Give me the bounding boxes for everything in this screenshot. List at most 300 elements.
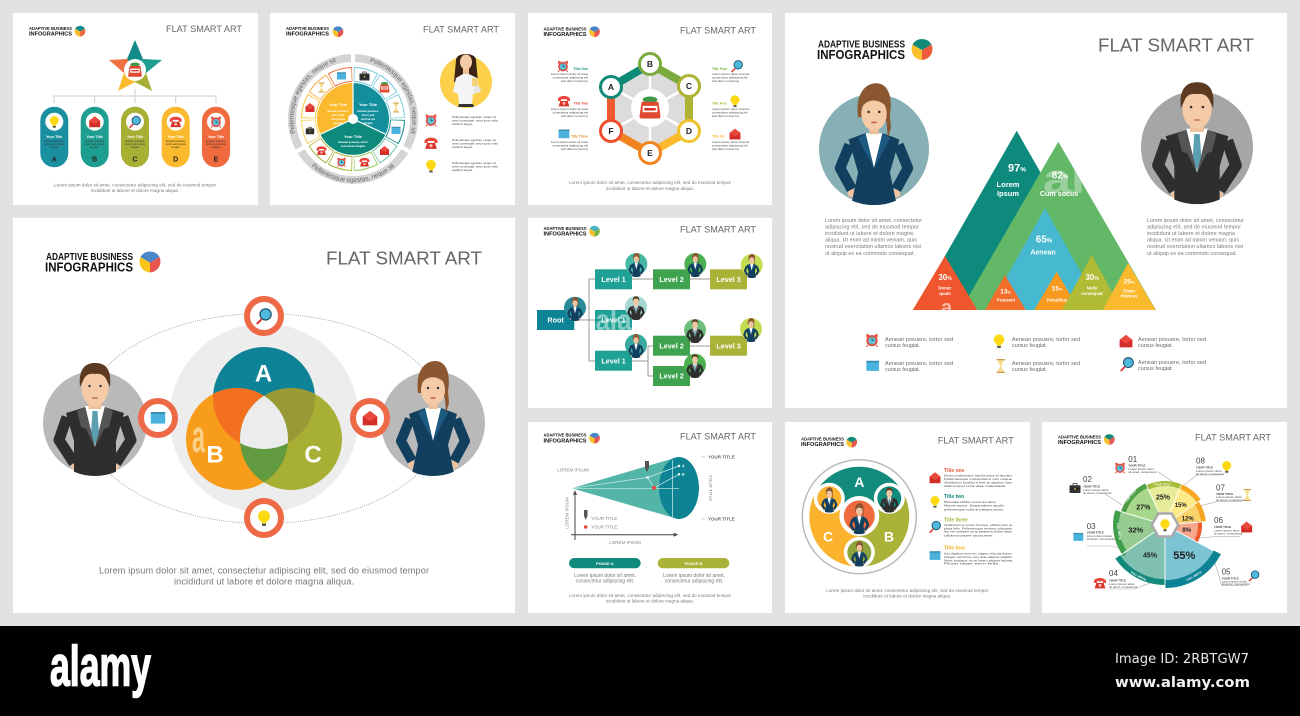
triangle chart: 13% (1000, 288, 1012, 296)
right legend: Phasellus efficitur purus leo lacus (944, 500, 997, 504)
callout 07: Lorem ipsum dolor (1216, 495, 1242, 499)
callout 04: Lorem ipsum dolor (1109, 582, 1135, 586)
right side notes: Title Four (712, 67, 728, 71)
heading: FLAT SMART ART (1098, 34, 1254, 56)
nodes: level 3: Level 3 (716, 275, 741, 284)
right legend (930, 468, 1013, 566)
left paragraph: nostrud exercitation ullamco laboris nisi (825, 244, 921, 250)
capsule E: E (214, 156, 219, 164)
nodes: level 2: Level 2 (659, 372, 684, 381)
legend: Aenean posuere, tortor sed (1012, 337, 1080, 343)
capsule D: Your Title (168, 135, 184, 139)
icon list: eleifend augue. (452, 145, 473, 149)
band labels: YOUR TITLE (1123, 489, 1137, 504)
footer text: Lorem ipsum dolor sit amet, consectetur adipiscing elit, sed do eiusmod tempor (99, 566, 429, 576)
heading: FLAT SMART ART (680, 25, 756, 35)
left side notes: consectetur adipiscing elit (553, 110, 588, 114)
capsule D: tortor sed cursus (166, 142, 186, 146)
watermark fragments: a (941, 297, 953, 319)
callout 02: sit amet, consectetur (1083, 491, 1112, 495)
footer text: Lorem ipsum dolor sit amet, consectetur adipiscing elit, sed do eiusmod tempor (54, 182, 216, 188)
callout 02 (1070, 475, 1112, 495)
callout 04: YOUR TITLE (1109, 578, 1126, 582)
callout 07: YOUR TITLE (1216, 492, 1233, 496)
callout 05: Lorem ipsum dolor (1222, 580, 1247, 584)
businessman portrait (43, 363, 147, 478)
right legend: Title three (944, 517, 968, 523)
logo (544, 226, 600, 238)
logo: INFOGRAPHICS (286, 32, 329, 38)
triangle chart (913, 131, 1156, 319)
pie sectors: tortor sed (332, 113, 345, 117)
icon list: Pellentesque egestas, neque sit (452, 115, 496, 119)
callout 03 (1073, 522, 1115, 541)
icon list: Pellentesque egestas, neque sit (452, 161, 496, 165)
hexagon diagram: C (686, 81, 692, 91)
left paragraph: adipiscing elit, sed do eiusmod tempor (825, 224, 919, 230)
cone legend: YOUR TITLE (591, 525, 617, 530)
callout 06 (1214, 516, 1252, 536)
callout 08: 08 (1196, 457, 1205, 466)
triangle chart: Praesent (997, 298, 1016, 302)
icon ring: calendar (141, 401, 175, 435)
watermark fragments: al (1043, 155, 1085, 202)
right paragraph: nostrud exercitation ullamco laboris nisi (1147, 244, 1243, 250)
capsule E: feugiat. (212, 145, 221, 149)
venn circles: a (192, 411, 206, 462)
right paragraph: adipiscing elit, sed do eiusmod tempor (1147, 224, 1241, 230)
triangle chart: 30% (1085, 273, 1099, 282)
heading: FLAT SMART ART (938, 435, 1014, 445)
logo: ADAPTIVE BUSINESS (29, 26, 73, 32)
triangle chart: Nulla (1087, 286, 1098, 290)
circle diagram: B (884, 529, 894, 545)
hexagon diagram: B (647, 59, 653, 69)
right side notes: sed diam nonummy (712, 114, 739, 118)
logo: ADAPTIVE BUSINESS (544, 433, 587, 439)
hexagon diagram: CASH (644, 107, 656, 112)
node: root (537, 310, 574, 330)
band labels: YOUR TITLE (1154, 482, 1170, 486)
left side notes: Title One (574, 67, 588, 71)
dotted orbit (83, 314, 445, 524)
left side notes: consectetur adipiscing elit (553, 144, 588, 148)
callout 06: 06 (1214, 516, 1223, 525)
logo: ADAPTIVE BUSINESS (818, 38, 905, 50)
circle diagram: A (854, 474, 864, 490)
right legend: Proin vitae sem felis. (944, 562, 1000, 566)
band labels: FULL WIDTH (1116, 523, 1122, 540)
band labels (1116, 482, 1202, 582)
cone: B (682, 472, 685, 476)
phase notes (574, 573, 725, 584)
hexagon diagram: E (647, 148, 653, 158)
capsule D: feugiat. (171, 145, 180, 149)
legend: cursus feugiat. (1138, 343, 1173, 349)
triangle chart: 30% (938, 273, 952, 282)
legend: Aenean posuere, tortor sed (1138, 337, 1206, 343)
right side notes: Lorem ipsum dolor sit amet (712, 107, 749, 111)
icon list: eleifend augue. (452, 122, 473, 126)
footer text: incididunt ut labore et dolore magna aliqua. (863, 594, 951, 599)
phase pills: PHASE A (596, 561, 614, 566)
callout 03: 03 (1087, 522, 1096, 531)
circle diagram (802, 460, 916, 574)
logo: ADAPTIVE BUSINESS (544, 26, 587, 32)
hexagon diagram: F (608, 126, 614, 136)
right side notes: consectetur adipiscing elit (712, 144, 748, 148)
callout 01: YOUR TITLE (1128, 464, 1146, 468)
logo: INFOGRAPHICS (1058, 440, 1101, 446)
icon ring: bulb (247, 501, 281, 535)
callout 02: Lorem ipsum dolor (1083, 488, 1109, 492)
right legend: Sed dapibus risus nec magna vehicula dictum (944, 552, 1012, 556)
icon list: amet consequat, tortor justo nulla (452, 118, 498, 122)
capsule B: Aenean posuere, (84, 139, 105, 143)
callout 06: sit amet, consectetur (1214, 532, 1243, 536)
outer grey arcs with text (288, 54, 418, 184)
logo (544, 26, 600, 38)
callout 08: YOUR TITLE (1196, 466, 1213, 470)
callout 07 (1216, 484, 1251, 502)
footer text: incididunt ut labore et dolore magna aliqua. (174, 576, 354, 586)
panel: circular wheel (270, 13, 515, 205)
triangle chart: Cum sociis (1040, 189, 1078, 198)
right legend: leo vel sodales urna pharetra tellus diam (944, 530, 1012, 534)
logo: INFOGRAPHICS (45, 260, 133, 274)
venn circles: B (206, 442, 224, 468)
left side notes: consectetur adipiscing elit (553, 76, 588, 80)
callout 05: 05 (1222, 568, 1231, 576)
logo (45, 251, 160, 274)
logo: ADAPTIVE BUSINESS (544, 226, 587, 232)
left paragraph: Lorem ipsum dolor sit amet, consectetur (825, 218, 922, 224)
callout 02: YOUR TITLE (1083, 484, 1100, 488)
footer text (826, 588, 989, 599)
footer text: incididunt ut labore et dolore magna aliqua. (91, 188, 179, 193)
nodes: level 3 (710, 269, 747, 356)
right legend: ullamcorper urna vitae malesuada. (944, 484, 1006, 488)
cone legend (584, 510, 617, 530)
hexagon diagram: A (608, 82, 614, 92)
nodes: level 1: Level 1 (601, 316, 626, 325)
callout 01: 01 (1128, 455, 1138, 464)
legend: Aenean posuere, tortor sed (885, 337, 953, 343)
phase pills: PHASE B (685, 561, 703, 566)
left side notes: Lorem ipsum dolor sit amet (551, 72, 588, 76)
capsule B: Your Title (87, 135, 103, 139)
footer text (99, 566, 429, 586)
triangle chart: 82% (1052, 170, 1069, 182)
right legend: Title two (944, 494, 964, 500)
cone (572, 457, 699, 519)
pie segments (1085, 445, 1245, 605)
nodes: level 2: Level 2 (659, 341, 684, 350)
right side notes (712, 61, 749, 151)
capsule E: tortor sed cursus (206, 142, 227, 146)
capsule A (40, 107, 68, 167)
right legend: ullamcorper posuere. (944, 533, 994, 537)
callout 07: sit amet, consectetur (1216, 498, 1245, 502)
percentages: 27% (1136, 504, 1151, 512)
right legend: Pellentesque consectetur orci neque (944, 477, 1012, 481)
heading: FLAT SMART ART (1195, 433, 1271, 443)
pie sectors: Your Title (329, 102, 348, 107)
callout 03: Lorem ipsum dolor (1087, 534, 1112, 538)
callout 07: 07 (1216, 484, 1225, 493)
pie sectors: sed cursus (361, 117, 376, 121)
logo: INFOGRAPHICS (817, 48, 905, 62)
icon list: eleifend augue. (452, 168, 473, 172)
alamy logo: alamy (50, 634, 151, 698)
callout 02: 02 (1083, 475, 1092, 484)
capsule E: Aenean posuere, (206, 139, 226, 143)
left paragraph: ut aliquip ex ea commodo consequat. (825, 251, 915, 257)
panel: team circle (785, 422, 1030, 613)
logo: ADAPTIVE BUSINESS (286, 26, 330, 32)
capsule A: Aenean posuere, (44, 139, 65, 143)
outer grey arcs with text: Pellentesque egestas, neque sit (289, 58, 336, 134)
right side notes: Lorem ipsum dolor sit amet (712, 140, 749, 144)
callout 05: sit amet, consectetur (1222, 582, 1250, 586)
right paragraph (1147, 218, 1244, 257)
axis labels: LOREM IPSUM (609, 540, 641, 545)
panel: venn diagram (13, 218, 515, 613)
left paragraph: aliqua. Ut enim ad minim veniam, quis (825, 238, 917, 244)
capsule B: B (92, 156, 97, 164)
triangle chart: Ipsum (997, 189, 1019, 198)
pie sectors: Your Title (359, 102, 378, 107)
footer text (569, 593, 732, 604)
nodes: level 2: Level 2 (659, 275, 684, 284)
right paragraph: Lorem ipsum dolor sit amet, consectetur (1147, 218, 1244, 224)
panel: pyramid chart (785, 13, 1287, 408)
right side notes: Lorem ipsum dolor sit amet (712, 72, 749, 76)
right legend: Title four (944, 546, 965, 552)
panel: hexagon (528, 13, 772, 205)
capsule C: Aenean posuere, (125, 139, 145, 143)
triangle chart: Etiam (1123, 288, 1135, 294)
capsule D (162, 107, 190, 167)
hexagon diagram: D (686, 126, 692, 136)
footer text: Lorem ipsum dolor sit amet, consectetur adipiscing elit, sed do eiusmod tempor (826, 588, 989, 593)
pie sectors: Aenean posuere, tortor (338, 140, 368, 144)
callout 04: 04 (1109, 569, 1118, 578)
capsule A: tortor sed cursus (44, 142, 65, 146)
businessman portrait (1141, 82, 1253, 206)
logo: INFOGRAPHICS (544, 232, 587, 238)
triangle chart: 97% (1008, 162, 1026, 174)
axis labels: YOUR TITLE (708, 475, 713, 501)
callout 05 (1222, 568, 1259, 586)
footer text (54, 182, 216, 193)
triangle chart: consequat (1081, 291, 1103, 296)
callout 08: Lorem ipsum dolor (1196, 469, 1222, 473)
legend: cursus feugiat. (1012, 343, 1047, 349)
node: root: Root (547, 316, 564, 325)
right legend: Integer vel lectus nec ante aliquet sagittis (944, 555, 1013, 559)
businesswoman illustration (440, 54, 492, 108)
capsule C (121, 107, 149, 167)
star diagram (109, 40, 162, 91)
callout 08 (1196, 457, 1231, 476)
percentages: 32% (1128, 526, 1144, 535)
right legend: porta felis. Pellentesque tempus vulputate (944, 526, 1012, 530)
capsule A: feugiat. (50, 145, 59, 149)
axis labels (557, 468, 713, 545)
right side notes: consectetur adipiscing elit (712, 110, 748, 114)
left side notes: Lorem ipsum dolor sit amet (551, 140, 588, 144)
axis labels: LOREM IPSUM (564, 497, 570, 529)
panel: segmented pie (1042, 422, 1287, 613)
triangle chart: 65% (1036, 234, 1053, 246)
band labels: FULL WIDTH (1186, 570, 1202, 582)
percentages: 25% (1156, 494, 1171, 501)
callout 03: YOUR TITLE (1087, 530, 1104, 534)
legend: cursus feugiat. (1012, 367, 1047, 373)
callout 04: sit amet, consectetur (1109, 585, 1138, 589)
cone legend: YOUR TITLE (591, 516, 617, 521)
triangle chart: rhoncus (1121, 294, 1138, 298)
phase notes: consectetur adipiscing elit. (665, 578, 723, 584)
callout 08: sit amet, consectetur (1196, 472, 1225, 476)
capsule C: Your Title (127, 135, 143, 139)
callout 01: sit amet, consectetur (1128, 470, 1157, 474)
legend: cursus feugiat. (885, 343, 920, 349)
triangle chart: 25% (1124, 278, 1135, 286)
heading: FLAT SMART ART (423, 24, 499, 34)
avatars (564, 253, 763, 379)
capsule D: Aenean posuere, (165, 139, 186, 143)
panel: star hierarchy (13, 13, 258, 205)
footer text (569, 180, 732, 191)
left side notes: sed diam nonummy (561, 147, 588, 151)
left side notes: sed diam nonummy (561, 114, 588, 118)
right legend: Mauris auctor. Suspendisse iaculis (944, 504, 1005, 508)
right side notes: sed diam nonummy (712, 147, 739, 151)
connectors (574, 279, 710, 376)
callout 01: Lorem ipsum dolor (1128, 467, 1154, 471)
panel: org chart (528, 218, 772, 408)
heading: FLAT SMART ART (680, 431, 756, 441)
connector lines (54, 89, 216, 103)
right side notes: Title Six (712, 134, 725, 138)
businesswoman portrait (381, 361, 485, 478)
axis labels: LOREM IPSUM (557, 468, 589, 472)
logo (817, 38, 932, 62)
callout 04 (1094, 569, 1138, 589)
logo: ADAPTIVE BUSINESS (1058, 434, 1102, 440)
pie sectors: feugiat (364, 121, 373, 125)
nodes: level 3: Level 3 (716, 341, 741, 350)
capsule B: feugiat. (90, 145, 99, 149)
legend: Aenean posuere, tortor sed (1012, 361, 1080, 367)
callout 06: Lorem ipsum dolor (1214, 529, 1240, 533)
image id: Image ID: 2RBTGW7 (1115, 652, 1249, 667)
footer text: incididunt ut labore et dolore magna aliqua. (606, 599, 694, 604)
icon list (424, 114, 498, 172)
pie sectors: sed cursus feugiat. (341, 144, 365, 148)
callout 03: sit amet, consectetur (1087, 537, 1115, 541)
capsule C: tortor sed cursus (125, 142, 146, 146)
right legend: pellentesque nulla at tristique purus. (944, 507, 1004, 511)
right titles: YOUR TITLE (708, 517, 735, 522)
left side notes: Title Two (574, 102, 588, 106)
triangle chart: Lorem (997, 180, 1020, 189)
capsule A: Your Title (46, 135, 62, 139)
pie sectors: Aenean posuere, (327, 109, 349, 113)
capsule C: feugiat. (131, 145, 140, 149)
nodes: level 1: ala (596, 304, 632, 337)
pie sectors: Your Title (344, 134, 363, 139)
capsule C: C (132, 156, 138, 164)
nodes: level 1 (595, 269, 632, 371)
capsule B: tortor sed cursus (85, 142, 105, 146)
band labels: FULL WIDTH (1130, 570, 1147, 582)
left side notes (551, 61, 588, 151)
outer grey arcs with text: Pellentesque egestas, neque sit (370, 58, 416, 134)
triangle chart: Donec (938, 286, 952, 290)
ring icons (306, 72, 400, 167)
logo: INFOGRAPHICS (801, 442, 844, 448)
triangle chart: quam (939, 291, 951, 296)
venn circles (186, 347, 342, 490)
phase notes: Lorem ipsum dolor sit amet, (663, 573, 725, 579)
right legend: Donec condimentum blandit neque sit faucibus (944, 474, 1012, 478)
percentages: 55% (1173, 550, 1196, 562)
legend (866, 334, 1206, 373)
capsule E: Your Title (208, 135, 224, 139)
nodes: level 1: Level 1 (601, 356, 626, 365)
footer text: Lorem ipsum dolor sit amet, consectetur adipiscing elit, sed do eiusmod tempor (569, 180, 732, 185)
legend: Aenean posuere, tortor sed (1138, 360, 1206, 366)
left paragraph: incididunt ut labore et dolore magna (825, 231, 913, 237)
right legend: Vestibulum ut ornare rhoncus, efficitur sem at (944, 523, 1012, 527)
legend: cursus feugiat. (885, 367, 920, 373)
panel: cone chart (528, 422, 772, 613)
ring cells (292, 58, 414, 180)
grey backdrop (170, 324, 358, 512)
logo: ADAPTIVE BUSINESS (46, 251, 133, 263)
centre hexagon (1152, 514, 1178, 536)
pie sectors: tortor sed (362, 113, 375, 117)
triangle chart: Penatibus (1047, 298, 1068, 302)
venn circles: C (304, 442, 322, 468)
alamy footer bar (0, 626, 1300, 716)
left side notes: Lorem ipsum dolor sit amet (551, 107, 588, 111)
percentages: 9% (1182, 528, 1192, 534)
hexagon diagram (600, 54, 700, 164)
website: www.alamy.com (1115, 675, 1250, 691)
axes (571, 492, 677, 540)
venn circles: A (255, 360, 272, 388)
icon list: Pellentesque egestas, neque sit (452, 138, 496, 142)
callout 06: YOUR TITLE (1214, 525, 1231, 529)
callout 05: YOUR TITLE (1222, 576, 1239, 580)
pie sectors: Aenean posuere, (357, 109, 379, 113)
phase notes: consectetur adipiscing elit. (576, 578, 634, 584)
right legend: Nunc tristique mi at lorem aliquet lacinia (944, 558, 1012, 562)
logo (286, 26, 343, 38)
percentages: 15% (1175, 503, 1187, 509)
footer text: incididunt ut labore et dolore magna aliqua. (606, 186, 694, 191)
logo (801, 437, 857, 448)
right side notes: Title Five (712, 102, 727, 106)
triangle chart: Aenean (1030, 250, 1056, 256)
phase notes: Lorem ipsum dolor sit amet, (574, 573, 636, 579)
right legend: Title one (944, 468, 965, 474)
right paragraph: ut aliquip ex ea commodo consequat. (1147, 251, 1237, 257)
